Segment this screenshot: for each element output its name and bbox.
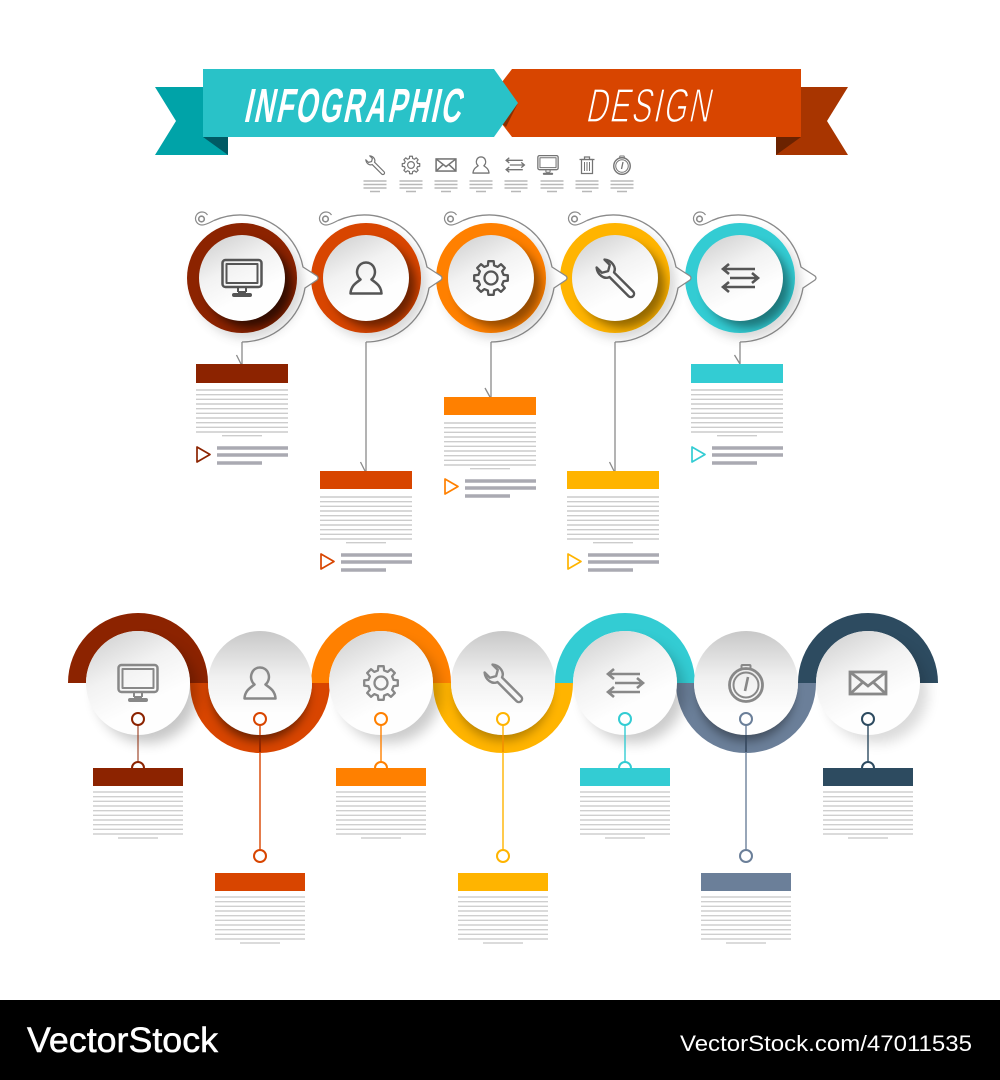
disc — [451, 631, 555, 735]
header bar — [823, 768, 913, 786]
note lines — [588, 555, 659, 570]
icon: stopwatch — [614, 156, 630, 174]
band 4 — [442, 683, 564, 744]
ribbon segment teal — [203, 69, 518, 137]
heading: infographic: INFOGRAPHIC — [241, 80, 471, 133]
wave timeline bands — [77, 622, 929, 744]
icon: gear — [364, 666, 398, 700]
band 7 — [807, 622, 929, 683]
icon: trash — [580, 157, 594, 174]
bubble, ring and icon — [560, 212, 691, 342]
play marker — [321, 554, 334, 569]
text lines — [458, 897, 548, 943]
disc — [694, 631, 798, 735]
connector with rings — [375, 713, 387, 774]
header bar — [320, 471, 412, 489]
icon: wrench — [365, 155, 387, 177]
panel: bottom step 7 — [816, 631, 920, 838]
ribbon segment red — [502, 69, 801, 137]
header bar — [93, 768, 183, 786]
text lines — [691, 390, 783, 436]
icon legend row — [365, 155, 630, 177]
note lines — [465, 481, 536, 496]
panel: top step 5 teal — [685, 212, 816, 463]
icon: monitor — [118, 665, 158, 700]
text lines — [336, 792, 426, 838]
icon: monitor — [538, 156, 558, 174]
icon: envelope — [850, 672, 886, 694]
connector with rings — [132, 713, 144, 774]
play marker — [692, 447, 705, 462]
connector line — [236, 342, 242, 364]
disc — [573, 631, 677, 735]
panel: bottom step 5 — [573, 631, 677, 838]
icon: envelope — [436, 159, 456, 171]
text lines — [701, 897, 791, 943]
icon: arrows — [608, 669, 643, 697]
panel: bottom step 4 — [451, 631, 555, 943]
panel: bottom step 2 — [208, 631, 312, 943]
heading: design: DESIGN — [583, 78, 720, 133]
panel: bottom step 1 — [86, 631, 190, 838]
header bar — [580, 768, 670, 786]
connector with rings — [740, 713, 752, 862]
connector with rings — [254, 713, 266, 862]
band 1 — [77, 622, 199, 683]
disc — [329, 631, 433, 735]
header bar — [458, 873, 548, 891]
footer url: VectorStock.com/47011535 — [680, 1031, 972, 1056]
disc shadows — [96, 641, 928, 743]
text lines — [567, 497, 659, 543]
band 6 — [685, 683, 807, 744]
band 5 — [564, 622, 686, 683]
play marker — [568, 554, 581, 569]
play marker — [197, 447, 210, 462]
ribbon fold right — [776, 137, 801, 155]
band 2 — [199, 683, 321, 744]
note lines — [217, 448, 288, 463]
icon: gear — [402, 156, 420, 174]
footer bar — [0, 1000, 1000, 1080]
banner: title ribbon — [155, 69, 848, 155]
connector line — [360, 342, 366, 471]
footer logo: VectorStock — [27, 1021, 219, 1060]
panel: top step 1 dark red — [187, 212, 318, 463]
text lines — [580, 792, 670, 838]
panel: bottom step 3 — [329, 631, 433, 838]
panel: top step 3 orange — [436, 212, 567, 496]
ribbon tail right — [776, 87, 848, 155]
connector with rings — [862, 713, 874, 774]
connector line — [485, 342, 491, 397]
bubble, ring and icon — [311, 212, 442, 342]
header bar — [336, 768, 426, 786]
icon: stopwatch — [730, 665, 762, 702]
text lines — [215, 897, 305, 943]
text lines — [444, 423, 536, 469]
disc — [208, 631, 312, 735]
icon: wrench — [483, 663, 527, 707]
ribbon fold left — [203, 137, 228, 155]
header bar — [691, 364, 783, 383]
connector line — [734, 342, 740, 364]
text lines — [823, 792, 913, 838]
panel: top step 2 red-orange — [311, 212, 442, 570]
panel: top step 4 yellow — [560, 212, 691, 570]
text lines — [196, 390, 288, 436]
header bar — [444, 397, 536, 415]
icon: user — [244, 668, 276, 698]
connector with rings — [619, 713, 631, 774]
ribbon tail left — [155, 87, 228, 155]
bubble, ring and icon — [685, 212, 816, 342]
header bar — [196, 364, 288, 383]
connector with rings — [497, 713, 509, 862]
bubble, ring and icon — [187, 212, 318, 342]
disc — [86, 631, 190, 735]
text lines — [93, 792, 183, 838]
header bar — [567, 471, 659, 489]
note lines — [341, 555, 412, 570]
icon: arrows — [506, 158, 524, 172]
text lines — [320, 497, 412, 543]
connector line — [610, 342, 615, 471]
disc — [816, 631, 920, 735]
band 3 — [320, 622, 442, 683]
ribbon shadow under arrow tip — [500, 103, 518, 127]
legend text lines — [364, 181, 634, 192]
note lines — [712, 448, 783, 463]
icon: user — [473, 157, 489, 173]
play marker — [445, 479, 458, 494]
bubble, ring and icon — [436, 212, 567, 342]
header bar — [215, 873, 305, 891]
header bar — [701, 873, 791, 891]
panel: bottom step 6 — [694, 631, 798, 943]
